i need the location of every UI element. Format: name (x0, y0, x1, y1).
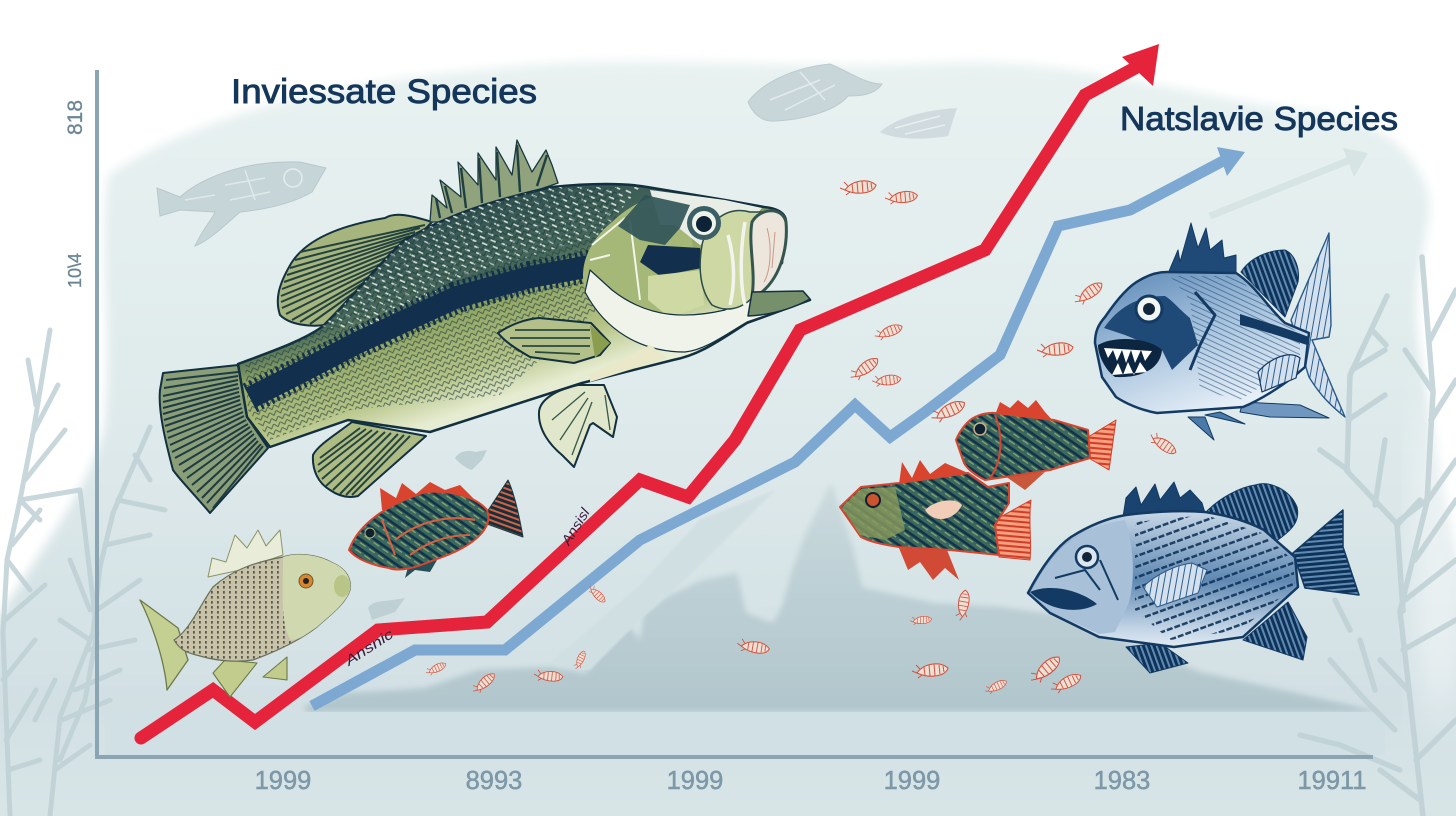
piranha texture (1170, 276, 1300, 400)
line label on red: lower: Ansnic (341, 626, 396, 669)
plankton (424, 181, 1178, 696)
bass soft dorsal fin (278, 215, 432, 326)
blue trend line: native (312, 147, 1245, 706)
band under hills (105, 712, 1385, 755)
blue bass lower right (1028, 482, 1359, 673)
bass eye (687, 206, 721, 240)
piranha gill (1190, 292, 1215, 370)
sunfish dorsal (208, 530, 283, 577)
x axis labels (255, 767, 1367, 795)
piranha lateral stripe (1240, 314, 1309, 345)
red arrowhead (1122, 44, 1159, 86)
bass dark stripe (250, 258, 625, 398)
y axis (95, 70, 99, 759)
y axis label: 818: 818 (64, 100, 87, 135)
blue bass tail (1293, 510, 1359, 595)
small red-green fish left (349, 480, 523, 578)
bass gill and throat (585, 270, 800, 352)
blue bass scales (1135, 515, 1295, 640)
blue bass eye (1076, 546, 1098, 568)
pale ribbon behind blue line (550, 490, 775, 670)
x axis labels: 1999 (667, 767, 723, 795)
sunfish body (174, 555, 350, 661)
piranha face mask (1104, 296, 1198, 370)
blue bass pectoral fin (1143, 563, 1207, 607)
piranha tail (1291, 233, 1345, 417)
piranha spiny dorsal (1167, 223, 1236, 276)
ghost fish: small (880, 108, 957, 139)
ghost fish: top centre (748, 64, 882, 121)
ghost fish: upper left (157, 162, 326, 246)
seaweed right (1300, 257, 1456, 816)
blue bass pelvic fin (1126, 643, 1188, 673)
large invasive bass (160, 140, 810, 513)
blue bass anal fin (1243, 602, 1307, 660)
line label on red: upper: Ansisl (557, 504, 593, 548)
bass belly highlight (590, 345, 668, 382)
x axis labels: 1983 (1094, 767, 1150, 795)
sunfish eye (299, 574, 313, 588)
sunfish head (283, 555, 350, 640)
blue bass soft dorsal (1207, 484, 1298, 547)
x axis labels: 8993 (466, 767, 522, 795)
bass spiny dorsal fin (430, 140, 558, 222)
heading: native species: Natslavie Species (1120, 100, 1398, 137)
bass head (583, 190, 762, 335)
piranha body (1095, 272, 1309, 413)
ghost fish: tiny creatures (368, 450, 487, 620)
sunfish tail (140, 600, 188, 690)
bass pelvic fins (539, 385, 617, 467)
sunfish lower fins (213, 657, 287, 697)
blue piranha-like fish upper right (1095, 223, 1345, 440)
piranha eye (1136, 296, 1162, 322)
bass upper flecks (322, 187, 640, 330)
x axis (95, 755, 1373, 759)
bass tail (160, 365, 268, 513)
red trend line: invasive (141, 44, 1159, 738)
red-green fish upper (956, 400, 1116, 490)
x axis labels: 19911 (1297, 767, 1367, 795)
blue bass head (1030, 520, 1133, 634)
sunfish mouth (334, 575, 350, 597)
x axis labels: 1999 (255, 767, 311, 795)
piranha mouth with teeth (1098, 339, 1162, 377)
blue bass body (1028, 511, 1298, 647)
forest silhouette (105, 483, 1385, 755)
heading: invasive species: Inviessate Species (231, 73, 537, 111)
pale sunfish lower left (140, 530, 350, 697)
blue bass spiny dorsal (1123, 482, 1205, 517)
bass anal fin (313, 422, 426, 497)
piranha pectoral fin (1258, 355, 1300, 392)
bass scales (245, 187, 620, 440)
bass body (238, 184, 810, 447)
piranha lower fins (1188, 402, 1329, 440)
piranha soft dorsal (1241, 250, 1298, 317)
seaweed left (3, 330, 165, 816)
red-green fish lower (840, 460, 1031, 580)
x axis labels: 1999 (884, 767, 940, 795)
y axis label: 1014: 10\4 (65, 253, 85, 288)
blue arrowhead (1217, 147, 1245, 176)
faint third trend arrow (1210, 148, 1368, 216)
bass pectoral fin (498, 318, 610, 363)
bass open mouth (700, 211, 786, 309)
